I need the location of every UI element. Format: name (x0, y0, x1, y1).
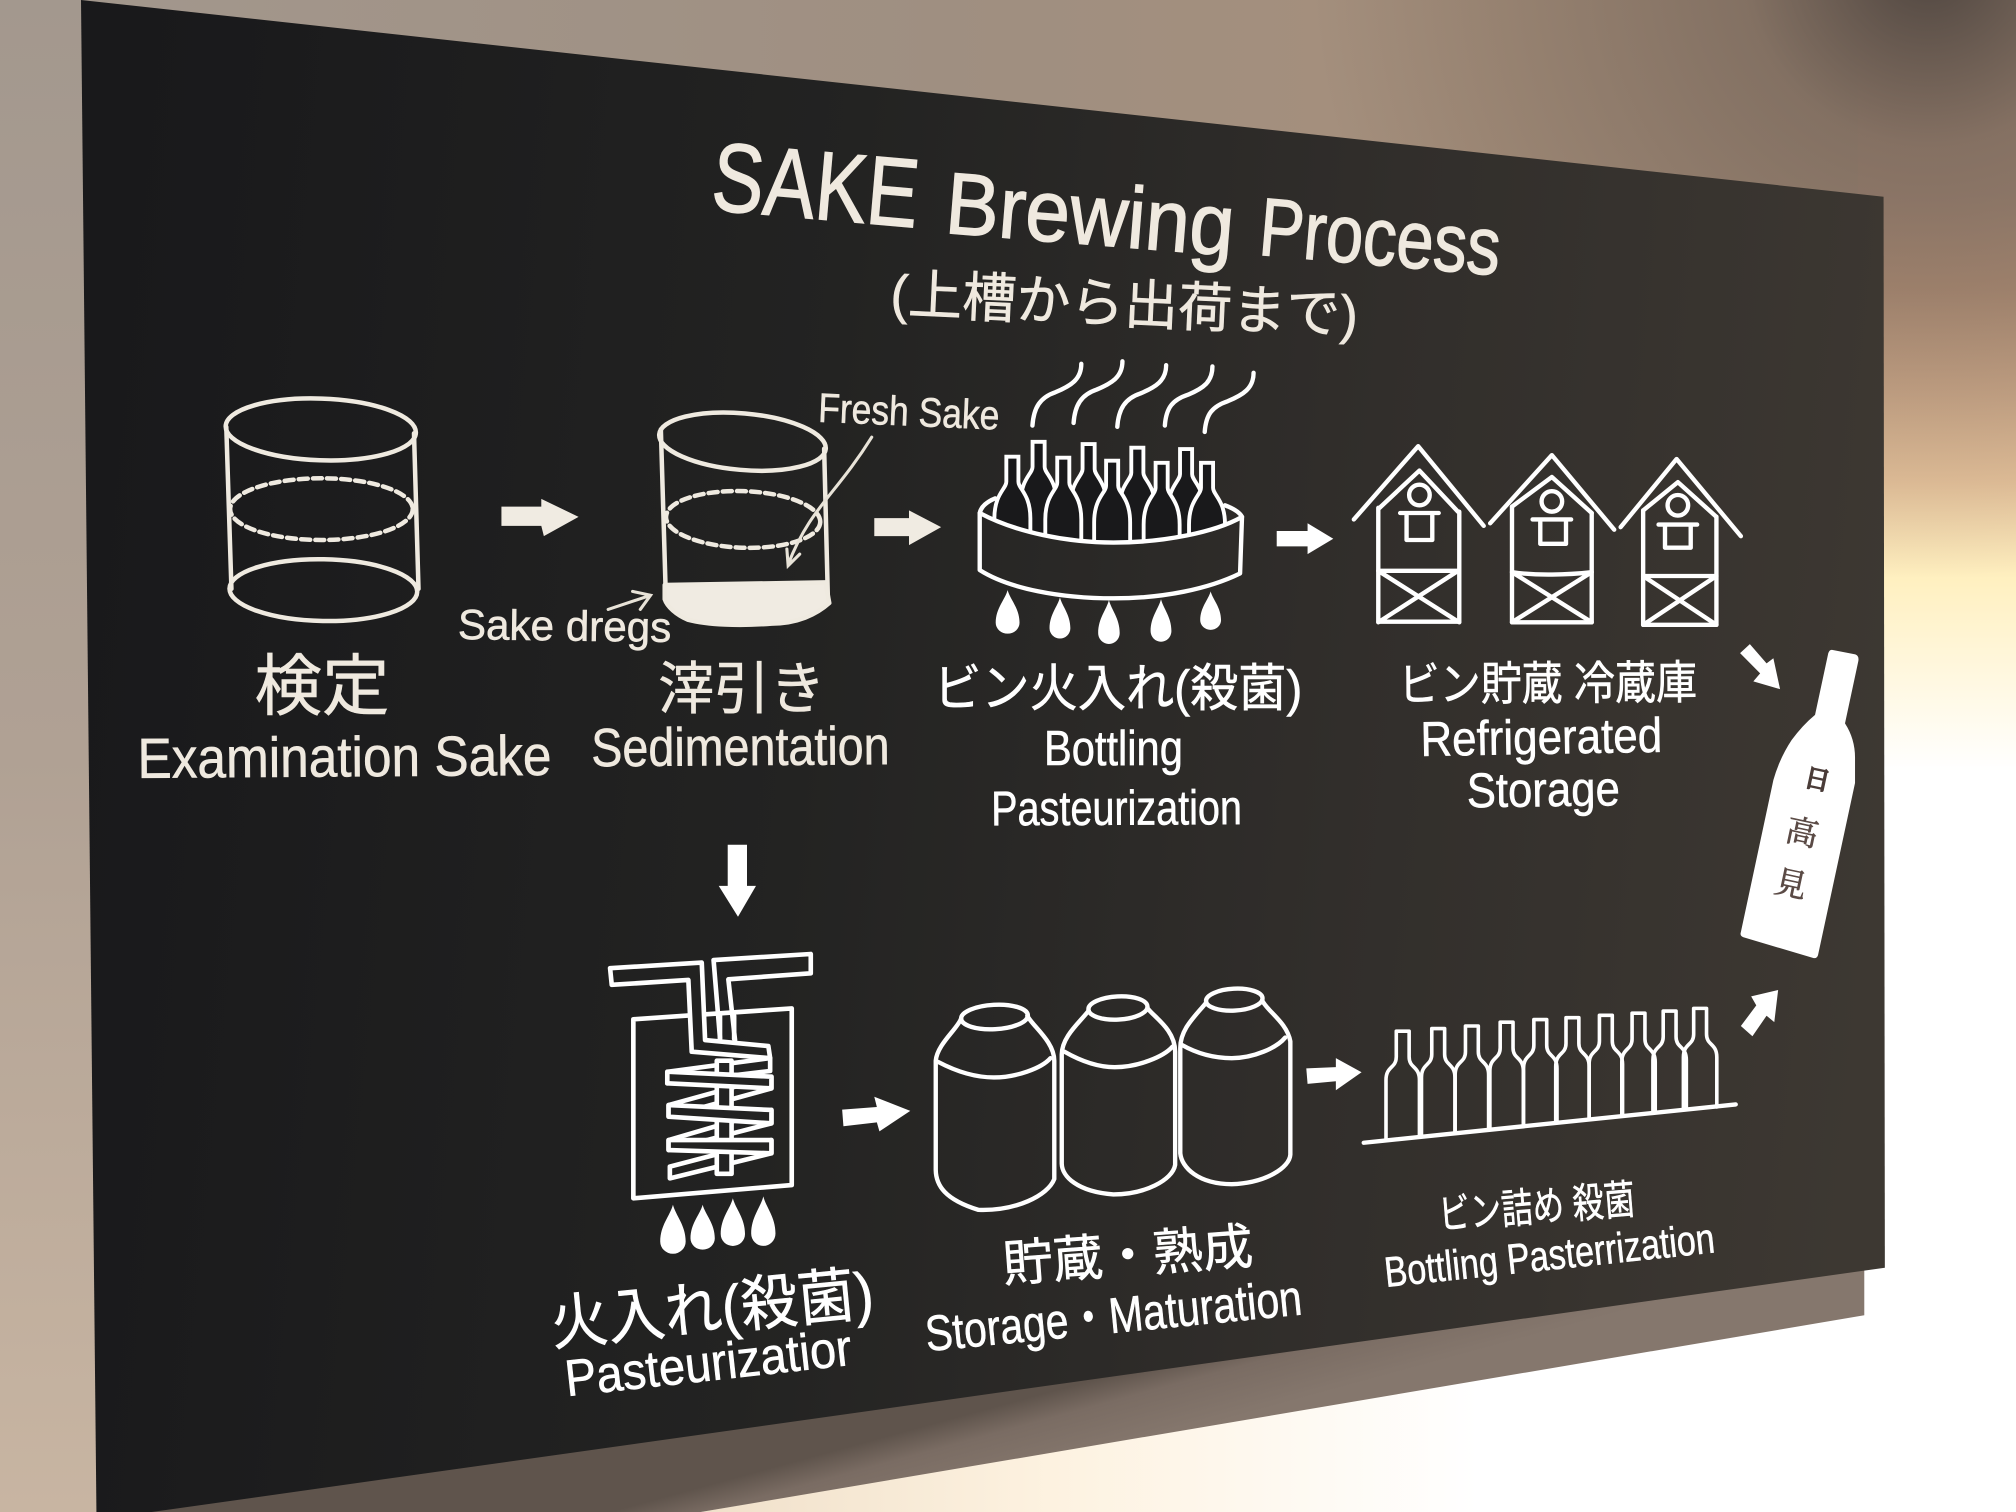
label: refrigerated storage jp: ビン貯蔵 冷蔵庫 (1399, 657, 1697, 711)
label: storage maturation jp: 貯蔵・熟成 (1001, 1219, 1255, 1293)
arrow: bottling to finished bottle (1741, 990, 1778, 1036)
step: storage and maturation (923, 987, 1304, 1362)
board shadow (141, 1266, 1864, 1512)
label: storage: Storage (1466, 762, 1620, 818)
step: bottling pasterrization (1364, 1008, 1736, 1296)
title: Process (1256, 182, 1504, 293)
subtitle: (上槽から出荷まで) (889, 264, 1359, 346)
title: Brewing (942, 154, 1238, 275)
icon: tank 3 (1180, 987, 1290, 1184)
icon: storehouse 2 (1490, 455, 1614, 622)
label: sedimentation en: Sedimentation (591, 716, 890, 778)
arrow: sedimentation down to pasteurization (719, 845, 756, 917)
label: bottling pasteurization jp: ビン火入れ(殺菌) (933, 659, 1302, 717)
icon: storehouse 1 (1354, 446, 1484, 622)
label: storage maturation en: Storage・Maturation (923, 1270, 1304, 1362)
step: sedimentation (458, 385, 1000, 778)
arrow: sedimentation to bottling (874, 510, 941, 545)
label: refrigerated: Refrigerated (1420, 709, 1663, 767)
bottle calligraphy: 日 (1801, 757, 1834, 799)
label: bottling pasterrization jp: ビン詰め 殺菌 (1437, 1176, 1637, 1238)
label: pasteurization: Pasteurization (991, 781, 1242, 836)
arrow: storage to bottling (1306, 1058, 1362, 1090)
bottle calligraphy: 高 (1782, 805, 1823, 857)
icon: bottles in hot bath (980, 442, 1242, 598)
label: bottling: Bottling (1044, 722, 1183, 776)
bottle calligraphy (1771, 757, 1834, 908)
step: refrigerated storage (1354, 446, 1741, 818)
label: sedimentation jp: 滓引き (658, 657, 825, 720)
arrow: storage to finished bottle (1740, 644, 1780, 689)
label: bottling pasterrization en: Bottling Pasterrization (1382, 1215, 1717, 1296)
title: SAKE (708, 122, 924, 249)
icon: drips (660, 1196, 775, 1254)
label: examination jp: 検定 (255, 650, 390, 725)
icon: steam lines (1032, 361, 1254, 432)
label: fresh sake: Fresh Sake (817, 385, 1000, 439)
arrow: fresh sake pointer (787, 437, 872, 566)
icon: finished sake bottle (1741, 650, 1858, 958)
label: sake dregs: Sake dregs (458, 601, 672, 651)
bottle calligraphy: 見 (1771, 856, 1812, 908)
icon: storehouse 3 (1621, 459, 1741, 625)
label: examination en: Examination Sake (137, 724, 552, 790)
icon: tank 2 (1062, 995, 1175, 1194)
icon: tank with sediment (657, 406, 829, 625)
icon: tank 1 (936, 1003, 1054, 1210)
arrow: sake dregs pointer (608, 591, 651, 609)
arrow: pasteurization to storage (842, 1097, 910, 1131)
icon: pasteurizer coil (610, 954, 811, 1198)
step: bottling pasteurization (933, 361, 1302, 836)
step: examination sake (137, 395, 552, 790)
label: pasteurization jp: 火入れ(殺菌) (548, 1259, 877, 1358)
arrow: examination to sedimentation (501, 499, 579, 536)
label: pasteurization en: Pasteurizatior (562, 1318, 854, 1407)
title (708, 122, 1504, 293)
icon: cylinder tank (225, 395, 418, 623)
icon: row of bottles on shelf (1364, 1008, 1736, 1143)
arrow: bottling to refrigerated storage (1277, 523, 1333, 554)
icon: drips (996, 590, 1221, 644)
step: pasteurization (548, 954, 877, 1407)
